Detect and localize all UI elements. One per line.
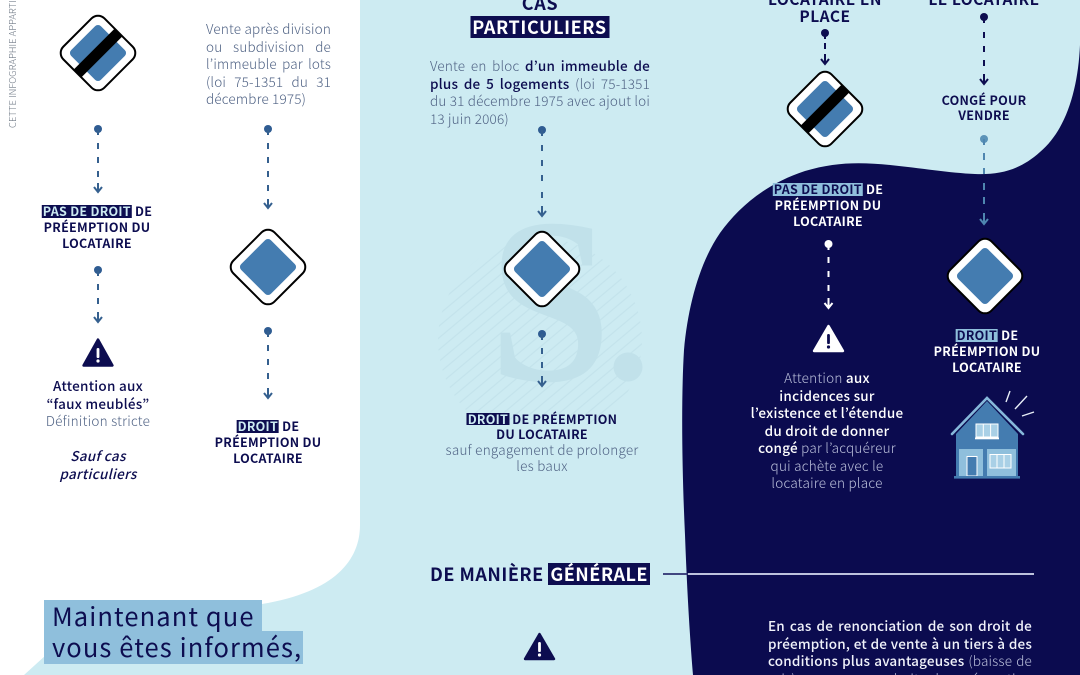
heading: de manière générale: GÉNÉRALE [550,561,648,587]
heading: de manière générale [430,561,650,587]
text: renonciation paragraph [768,615,1032,675]
text: droit, column 2 [215,416,321,467]
text: attention incidences: du droit de donner [765,420,889,440]
icon: priority road sign, centre [501,228,583,310]
callout: maintenant que vous êtes informés: Maintenant que [52,597,255,634]
arrow: column 1 top [94,125,102,192]
text: pas de droit, right: PRÉEMPTION DU [775,195,881,214]
text: droit, centre: sauf engagement de prolonger [445,439,639,459]
text: vente après division: ou subdivision de [206,36,331,56]
arrow: right B middle [980,135,988,224]
arrow: right B top [980,13,988,84]
text: droit, centre: DU LOCATAIRE [496,424,588,443]
text: droit, column 2: PRÉEMPTION DU [215,432,321,451]
icon: no-priority road sign, right [784,68,866,150]
watermark: S logo [438,224,642,425]
text: attention incidences: Attention aux [784,367,870,387]
callout: maintenant que vous êtes informés [44,597,303,665]
text: attention incidences: congé par l’acquéreur [758,437,896,457]
text: droit, far right: DE [1001,325,1018,344]
text: vente après division: l’immeuble par lots [206,53,331,73]
icon: warning centre [525,634,554,659]
panel: navy area [682,45,1080,675]
text: pas de droit, column 1: PAS DE DROIT [43,201,131,220]
icon: house [952,391,1034,479]
icon: priority road sign, far right [944,235,1026,317]
text: faux meublés callout [46,375,150,430]
text: vente en bloc: Vente en bloc d’un immeuble de [430,55,650,75]
text: droit, column 2: DROIT [238,416,278,435]
text: vente en bloc [430,55,650,128]
text: vente en bloc: 13 juin 2006) [430,108,509,128]
text: droit, far right [934,325,1040,376]
arrow: column 2 bottom [264,327,272,398]
text: droit, far right: PRÉEMPTION DU [934,341,1040,360]
text: droit, far right: DROIT [957,325,997,344]
icon: warning right [814,326,843,351]
icon: warning column 1 [84,340,112,366]
text: renonciation paragraph: conditions plus avantageuses (baisse de [768,650,1032,670]
text: pas de droit, right: DE [866,179,883,198]
text: sauf cas particuliers: Sauf cas [70,445,126,465]
text: attention incidences: l’existence et l’étendue [751,402,903,422]
text: droit, far right: LOCATAIRE [952,357,1022,376]
text: attention incidences [751,367,903,492]
text: droit, centre [445,408,639,475]
text: attention incidences: locataire en place [771,472,883,492]
arrow: centre top [538,126,546,216]
text: congé pour vendre [942,90,1026,124]
text: pas de droit, column 1: LOCATAIRE [62,233,132,252]
text: vente en bloc: du 31 décembre 1975 avec ajout loi [430,90,650,110]
text: faux meublés callout: “faux meublés” [46,392,150,412]
text: vente après division: Vente après division [206,18,331,38]
text: attention incidences: incidences sur [779,384,875,404]
arrow: column 1 bottom [94,266,102,322]
heading: de manière générale: DE MANIÈRE [430,561,544,587]
callout: maintenant que vous êtes informés: vous êtes informés, [52,628,302,665]
icon: priority road sign, column 2 [227,226,309,308]
text: pas de droit, column 1: PRÉEMPTION DU [44,217,150,236]
arrow: right A bottom [824,240,832,308]
text: attention incidences: qui achète avec le [771,454,883,474]
text: pas de droit, right: LOCATAIRE [793,211,863,230]
text: pas de droit, right: PAS DE DROIT [774,179,862,198]
text: droit, centre: DROIT [468,408,508,428]
text: pas de droit, column 1: DE [135,201,152,220]
text: vente en bloc: plus de 5 logements (loi 75-1351 [430,72,650,92]
text: renonciation paragraph: En cas de renonciation de son droit de [768,615,1032,635]
text: droit, centre: DE PRÉEMPTION [512,408,617,428]
text: renonciation paragraph: préemption, et de vente à un tiers à des [768,632,1032,652]
arrow: centre bottom [538,330,546,386]
text: droit, column 2: LOCATAIRE [233,448,303,467]
text: faux meublés callout: Attention aux [53,375,143,395]
text: vente après division: décembre 1975) [206,88,306,108]
text: vente après division [206,18,331,108]
divider line [663,573,1034,575]
heading: locataire en place [768,0,882,27]
icon: no-priority road sign, column 1 [57,12,139,94]
text: sauf cas particuliers [59,445,138,482]
text: faux meublés callout: Définition stricte [46,410,150,430]
text: pas de droit, right [772,179,883,230]
watermark: S logo: S [489,171,611,432]
arrow: right A top [821,29,829,64]
text: congé pour vendre: CONGÉ POUR [942,90,1026,109]
text: sauf cas particuliers: particuliers [59,462,137,482]
text: droit, column 2: DE [282,416,299,435]
heading: locataire en place: PLACE [799,5,851,27]
text: pas de droit, column 1 [42,201,152,252]
text: droit, centre: les baux [516,455,568,475]
heading: particuliers: PARTICULIERS [472,14,607,40]
arrow: column 2 top [264,125,272,208]
text: vente après division: (loi 75-1351 du 31 [206,70,331,90]
text: congé pour vendre: VENDRE [958,104,1010,124]
